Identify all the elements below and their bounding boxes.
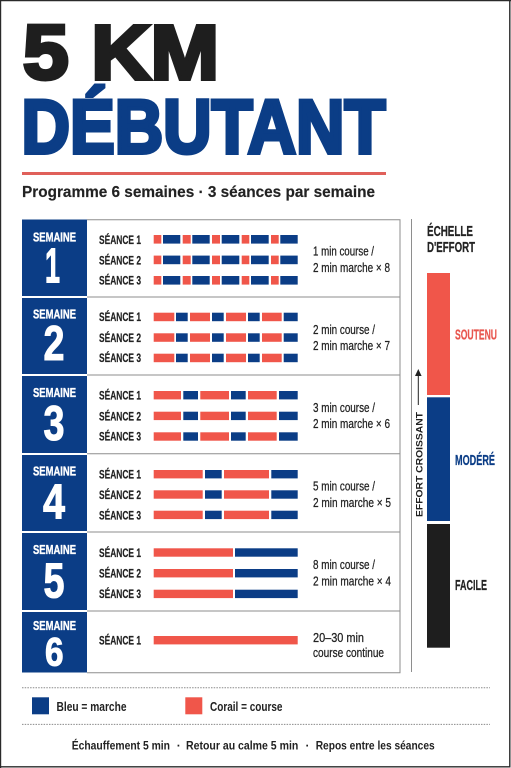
week 3: 2 min marche × 6 bbox=[313, 416, 390, 431]
week 4: 2 min marche × 5 bbox=[313, 495, 391, 510]
bars: week 5 bbox=[154, 548, 298, 598]
week 2: 2 min course / bbox=[313, 322, 375, 337]
week 2: 2 bbox=[44, 317, 64, 371]
week 6: SÉANCE 1 bbox=[99, 632, 141, 648]
week 5: 5 bbox=[44, 554, 64, 608]
week 3: SEMAINE bbox=[33, 385, 76, 400]
week 5 bbox=[22, 533, 391, 610]
scale: facile bbox=[427, 524, 450, 648]
week 3: 3 min course / bbox=[313, 400, 375, 415]
footer note: · bbox=[306, 738, 310, 752]
arrow: effort direction bbox=[415, 369, 422, 405]
title: 5 KM: 5 KM bbox=[23, 10, 219, 96]
panel: program table bbox=[22, 220, 400, 674]
week 2: SEMAINE bbox=[33, 306, 76, 322]
legend: marche bbox=[32, 697, 127, 714]
week 3: SÉANCE 2 bbox=[99, 408, 141, 423]
week 4: 5 min course / bbox=[313, 478, 375, 494]
title: DÉBUTANT: DÉBUTANT bbox=[22, 85, 386, 170]
footer note: Repos entre les séances bbox=[316, 738, 435, 752]
week 5: 8 min course / bbox=[313, 557, 375, 572]
week 6 bbox=[22, 612, 384, 674]
week 2 bbox=[22, 298, 390, 374]
bars: week 2 bbox=[154, 313, 298, 362]
label: facile: FACILE bbox=[455, 578, 487, 594]
week 5: SÉANCE 1 bbox=[99, 545, 141, 560]
footer note: · bbox=[177, 738, 181, 752]
footer note: Échauffement 5 min bbox=[72, 738, 170, 752]
week 3: SÉANCE 3 bbox=[99, 429, 141, 444]
scale: modéré bbox=[427, 397, 450, 521]
week 3 bbox=[22, 376, 390, 453]
scale: soutenu bbox=[427, 273, 450, 395]
subtitle: Programme 6 semaines · 3 séances par semaine bbox=[22, 184, 375, 201]
week 4: SÉANCE 2 bbox=[99, 487, 141, 502]
week 6: SEMAINE bbox=[33, 618, 76, 633]
week 1: SÉANCE 1 bbox=[99, 232, 141, 247]
legend: course: Corail = course bbox=[210, 700, 283, 714]
scale heading: D'EFFORT bbox=[427, 240, 475, 256]
week 4: SÉANCE 1 bbox=[99, 466, 141, 482]
legend: course bbox=[185, 697, 283, 714]
week 4: SEMAINE bbox=[33, 464, 76, 479]
week 4: SÉANCE 3 bbox=[99, 507, 141, 522]
week 1: 1 min course / bbox=[313, 244, 374, 258]
footer note bbox=[72, 738, 435, 752]
week 5: SEMAINE bbox=[33, 542, 76, 557]
week 2: SÉANCE 2 bbox=[99, 330, 141, 345]
week 1: 2 min marche × 8 bbox=[313, 260, 390, 275]
bars: week 1 bbox=[154, 235, 298, 285]
week 1: SÉANCE 2 bbox=[99, 252, 141, 267]
week 1: SEMAINE bbox=[33, 230, 76, 245]
week 2: SÉANCE 3 bbox=[99, 350, 141, 365]
bars: week 4 bbox=[154, 470, 298, 519]
legend: marche: Bleu = marche bbox=[56, 700, 127, 714]
week 3: SÉANCE 1 bbox=[99, 388, 141, 403]
bars: week 6 bbox=[154, 636, 298, 644]
week 4: 4 bbox=[43, 476, 65, 530]
bars: week 3 bbox=[154, 391, 298, 441]
scale heading bbox=[427, 223, 475, 256]
week 2: SÉANCE 1 bbox=[99, 309, 141, 324]
week 6: 20–30 min bbox=[313, 630, 364, 645]
footer note: Retour au calme 5 min bbox=[186, 738, 298, 752]
week 1: 1 bbox=[45, 240, 60, 294]
week 1 bbox=[22, 220, 390, 296]
week 2: 2 min marche × 7 bbox=[313, 338, 390, 353]
panel: effort scale bbox=[412, 219, 497, 672]
week 5: SÉANCE 3 bbox=[99, 586, 141, 601]
week 5: 2 min marche × 4 bbox=[313, 574, 391, 588]
week 6: course continue bbox=[313, 645, 384, 660]
week 5: SÉANCE 2 bbox=[99, 566, 141, 580]
axis label: effort croissant: EFFORT CROISSANT bbox=[414, 412, 425, 517]
heading rule bbox=[22, 172, 386, 175]
week 4 bbox=[22, 455, 391, 531]
scale heading: ÉCHELLE bbox=[427, 223, 473, 240]
week 1: SÉANCE 3 bbox=[99, 273, 141, 288]
week 3: 3 bbox=[44, 397, 64, 451]
week 6: 6 bbox=[45, 630, 64, 674]
